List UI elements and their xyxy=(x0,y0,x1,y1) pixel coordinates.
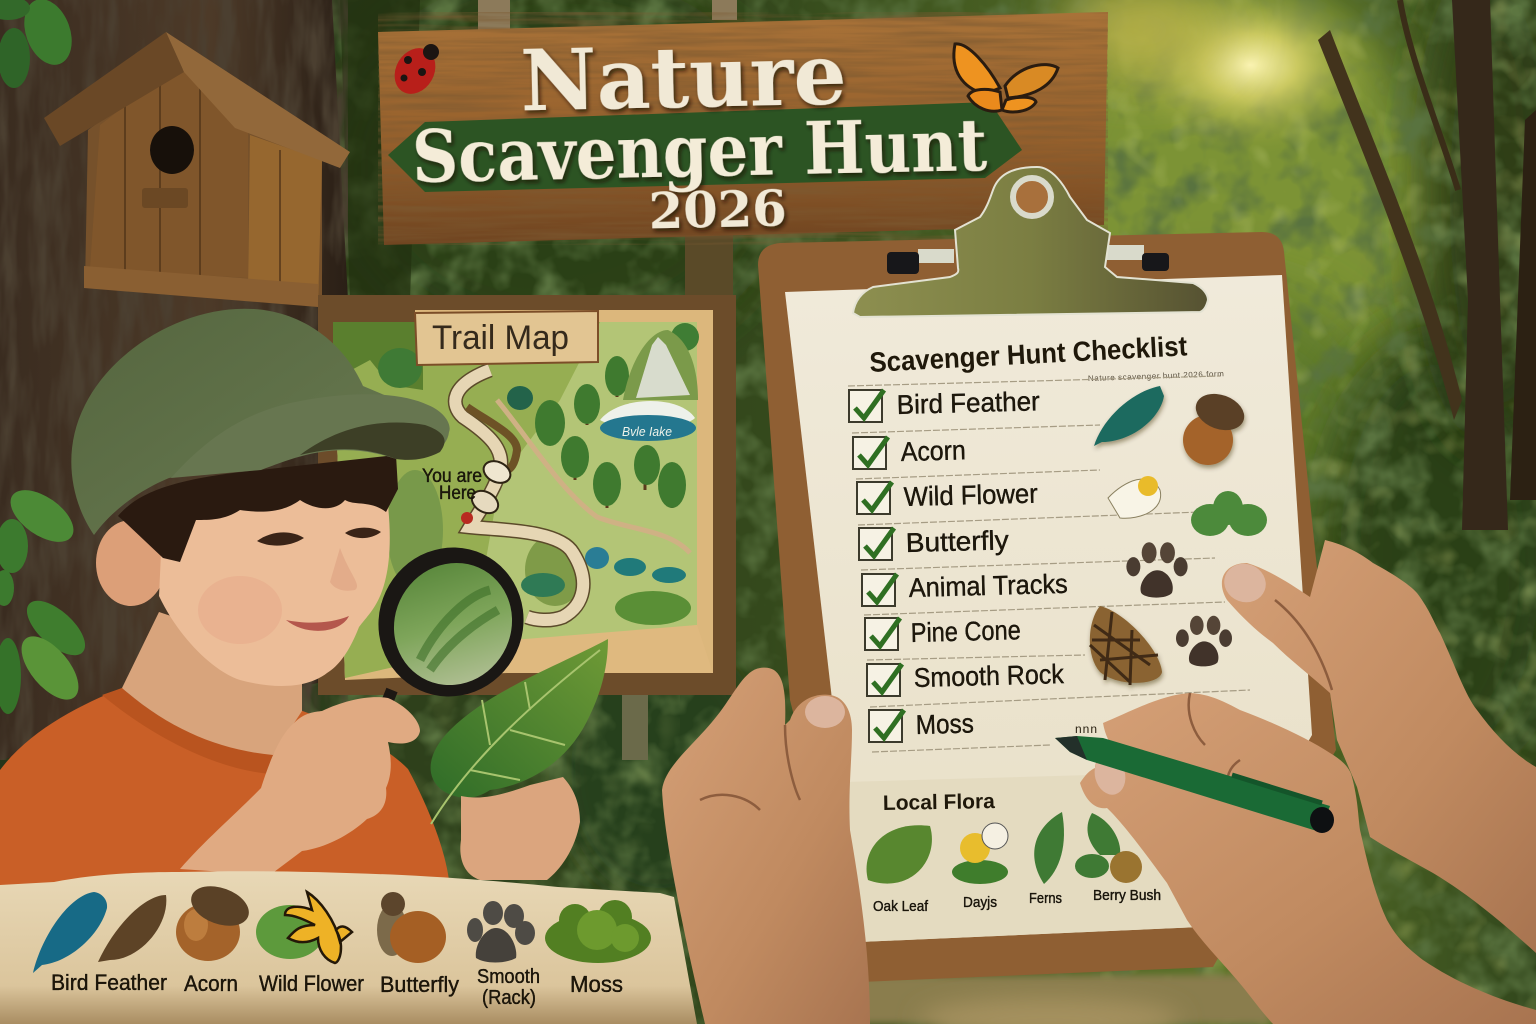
wooden sign xyxy=(378,0,1108,245)
item: acorn xyxy=(176,879,254,996)
checklist row: Acorn: Acorn xyxy=(900,435,966,467)
neck xyxy=(122,612,302,755)
title: Scavenger Hunt: Scavenger Hunt xyxy=(411,102,988,199)
item: butterfly: Butterfly xyxy=(380,972,459,997)
item: smooth rock: Smooth xyxy=(477,966,540,988)
checklist row: Pine Cone xyxy=(865,615,1021,650)
scribble note: nnn xyxy=(1075,722,1098,736)
checklist icon: feather xyxy=(1094,386,1164,446)
checklist row: Smooth Rock xyxy=(867,659,1065,696)
left hand xyxy=(662,668,870,1024)
flora: berry bush xyxy=(1075,813,1161,904)
upper right hand xyxy=(1219,540,1536,953)
checklist row: Animal Tracks: Animal Tracks xyxy=(908,569,1068,603)
row lines xyxy=(848,376,1250,752)
checklist paper xyxy=(785,275,1312,942)
boy xyxy=(0,309,450,890)
left spring xyxy=(887,249,954,274)
checklist icon: paw print xyxy=(1126,542,1188,598)
icon: magnifying glass xyxy=(338,524,548,825)
shirt xyxy=(0,688,449,890)
local flora section xyxy=(845,775,1250,942)
checklist row: Butterfly xyxy=(859,525,1010,560)
checklist row: Butterfly: Butterfly xyxy=(905,525,1010,558)
item: wild flower: Wild Flower xyxy=(259,971,364,996)
checklist icon: leaves xyxy=(1191,491,1267,536)
flora: daisies xyxy=(952,823,1008,911)
right spring xyxy=(1106,245,1169,271)
flora: oak leaf: Oak Leaf xyxy=(873,898,929,915)
item: moss xyxy=(545,900,651,997)
checklist row: Pine Cone: Pine Cone xyxy=(910,615,1021,648)
checklist row: Moss xyxy=(869,708,974,742)
ribbon xyxy=(388,102,1022,192)
item: acorn: Acorn xyxy=(184,971,238,996)
checklist row: Smooth Rock: Smooth Rock xyxy=(913,659,1065,693)
trees xyxy=(507,356,686,508)
clipboard xyxy=(758,232,1336,982)
icon: butterfly xyxy=(954,44,1058,112)
clipboard clip xyxy=(853,167,1208,317)
boy's hand holding magnifier xyxy=(180,697,420,875)
flora: ferns: Ferns xyxy=(1029,890,1062,907)
here label: Here xyxy=(439,483,476,504)
trail path xyxy=(455,370,690,620)
map title banner: Trail Map xyxy=(432,319,569,357)
checklist row: Bird Feather: Bird Feather xyxy=(896,386,1040,420)
hair xyxy=(118,455,398,562)
checklist row: Animal Tracks xyxy=(862,569,1068,606)
you are here label: You are xyxy=(422,466,482,487)
checklist icon: flower xyxy=(1108,476,1161,518)
item: moss: Moss xyxy=(570,971,623,997)
item: smooth rock: (Rack) xyxy=(482,987,536,1009)
checklist row: Bird Feather xyxy=(849,386,1040,422)
map title banner xyxy=(415,311,598,365)
tree trunk xyxy=(0,0,348,760)
waterfall and lake xyxy=(600,330,698,441)
ear xyxy=(96,520,166,606)
title: year: 2026 xyxy=(648,179,787,240)
face xyxy=(159,490,390,686)
checklist icon: pine cone xyxy=(1090,606,1162,685)
icon: ladybug xyxy=(387,41,443,101)
checklist row: Wild Flower: Wild Flower xyxy=(903,479,1038,512)
item: butterfly xyxy=(377,892,459,997)
flora: oak leaf xyxy=(867,825,932,915)
checklist row: Wild Flower xyxy=(857,479,1038,514)
item: bird feather xyxy=(33,892,167,995)
collar xyxy=(102,688,277,774)
forest clumps xyxy=(333,322,699,625)
heading: Scavenger Hunt Checklist xyxy=(869,330,1188,378)
trail map xyxy=(318,295,736,695)
collection strip xyxy=(0,871,697,1024)
fine print: Nature scavenger hunt 2026 form xyxy=(1088,369,1224,383)
birdhouse xyxy=(44,32,350,307)
flora: ferns xyxy=(1029,812,1064,907)
eyes and mouth xyxy=(257,532,304,546)
checklist row: Moss: Moss xyxy=(915,708,974,740)
boy's hand holding leaf xyxy=(460,777,580,880)
item: smooth rock xyxy=(467,901,540,1009)
leaves left of boy xyxy=(0,480,94,714)
checklist icon: second paw print xyxy=(1176,616,1232,666)
icon: green leaf xyxy=(431,639,608,824)
flora: berry bush: Berry Bush xyxy=(1093,887,1161,904)
checklist icon: acorn xyxy=(1183,387,1249,465)
flora heading: Local Flora xyxy=(883,790,995,815)
item: bird feather: Bird Feather xyxy=(51,970,167,995)
flora: daisies: Dayjs xyxy=(963,894,997,911)
cap xyxy=(71,309,396,535)
waterfall and lake: Bvle Iake xyxy=(622,424,672,439)
writing hand xyxy=(1080,693,1536,1024)
green pen xyxy=(1055,736,1334,833)
checklist row: Acorn xyxy=(853,435,966,469)
title: Nature: Nature xyxy=(519,25,847,130)
item: wild flower xyxy=(256,892,364,996)
